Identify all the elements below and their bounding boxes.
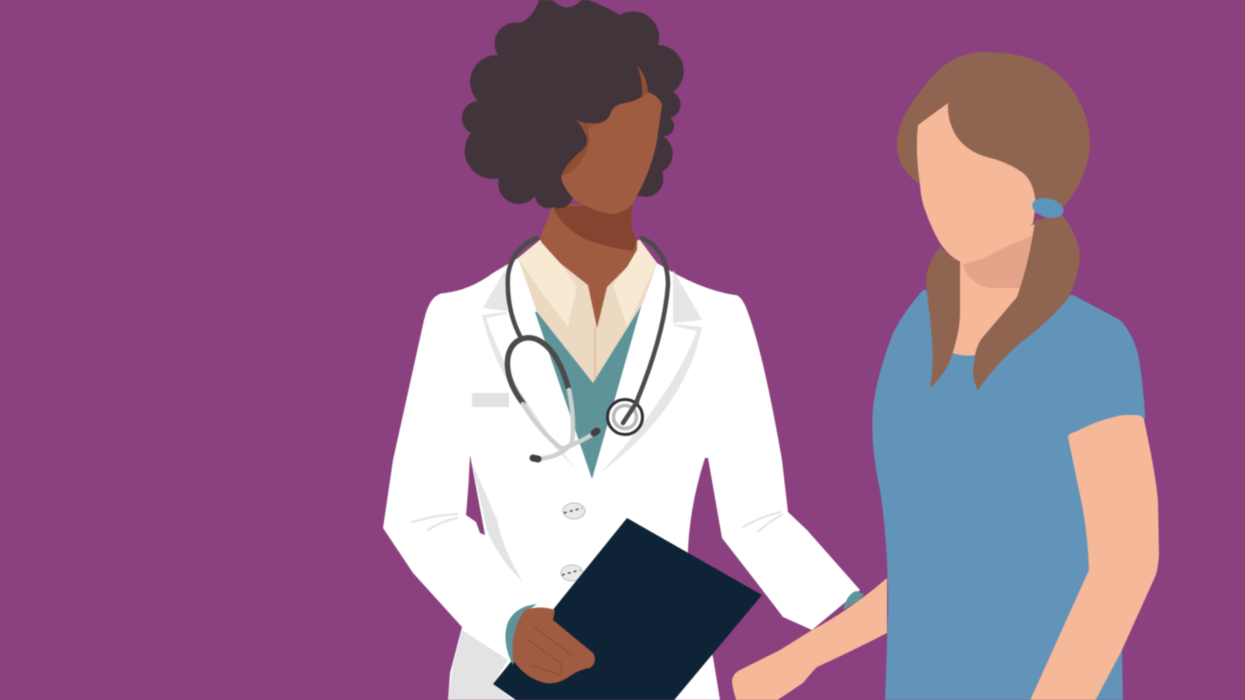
doctor hair	[462, 0, 684, 208]
coat button lower	[561, 565, 583, 581]
ear tip left	[533, 458, 538, 459]
coat lower fold	[448, 630, 513, 700]
patient hair back	[897, 52, 1090, 215]
tube loop	[507, 338, 568, 403]
coat side fold	[472, 463, 523, 582]
gap between left arm and body	[466, 455, 485, 535]
chest piece	[608, 400, 642, 434]
doctor hair front over neck	[535, 190, 573, 208]
scrubs v-neck	[535, 300, 643, 479]
doctor face	[561, 92, 662, 214]
neck shadow	[553, 203, 637, 251]
neck v over shirt	[540, 203, 637, 328]
left tube	[508, 238, 537, 338]
patient neck	[952, 223, 1036, 356]
white coat	[383, 240, 860, 700]
sleeve wrinkles left	[412, 514, 457, 530]
shirt lower	[518, 240, 657, 383]
patient right arm	[1028, 415, 1159, 700]
patient face	[917, 103, 1035, 263]
clipboard	[493, 518, 762, 700]
finger lines	[528, 627, 572, 675]
patient shirt	[872, 290, 1145, 700]
doctor hair lock over forehead	[637, 66, 648, 97]
left cuff	[505, 604, 537, 665]
grey tube left	[523, 404, 594, 449]
left lapel line	[482, 312, 577, 470]
left collar	[518, 240, 577, 327]
patient left arm	[732, 578, 887, 700]
patient figure	[732, 52, 1159, 700]
right tube	[630, 238, 668, 417]
doctor face shadow edge	[561, 118, 605, 177]
right lapel line	[600, 324, 702, 473]
right collar	[613, 240, 657, 327]
doctor hand	[512, 608, 595, 683]
patient left hair strand	[926, 247, 960, 388]
right cuff	[843, 591, 864, 610]
breast pocket	[472, 393, 509, 407]
ear tip right	[594, 431, 597, 433]
patient hair tie	[1030, 195, 1066, 221]
coat button upper	[563, 503, 585, 519]
grey tube right	[536, 390, 573, 459]
sleeve wrinkles right	[743, 512, 782, 532]
patient ponytail	[973, 215, 1080, 390]
patient neck shadow	[963, 235, 1034, 288]
doctor figure	[383, 0, 864, 700]
shirt placket	[594, 327, 596, 380]
stethoscope	[507, 238, 668, 459]
right lapel underside	[673, 270, 702, 323]
left lapel underside	[483, 270, 507, 311]
